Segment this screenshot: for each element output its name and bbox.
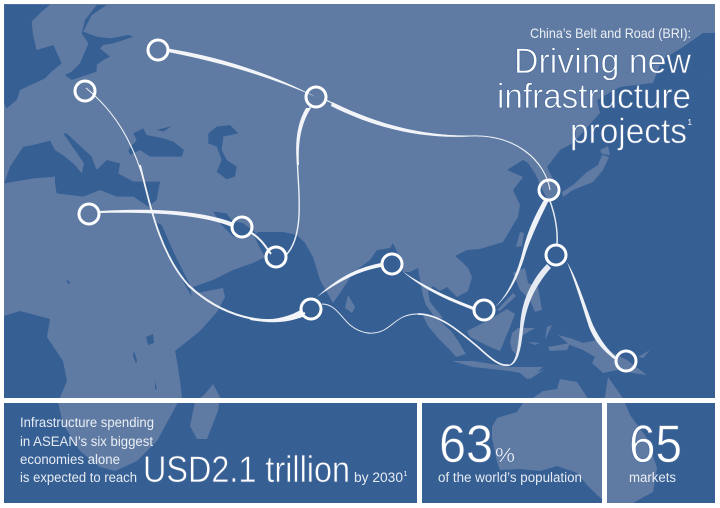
panel: ASEAN infrastructure spending bbox=[20, 415, 408, 490]
population caption: of the world’s population bbox=[438, 470, 582, 485]
route: Philippines Sea to New Guinea bbox=[567, 262, 617, 359]
description text: economies alone bbox=[20, 452, 120, 467]
land: Madagascar bbox=[190, 384, 220, 439]
route: North Africa to Gulf bbox=[100, 210, 234, 227]
panel: markets bbox=[629, 415, 682, 485]
title line 1: Driving new bbox=[514, 42, 692, 81]
route: Bay of Bengal to South China Sea bbox=[402, 271, 474, 310]
panel: world population share bbox=[438, 415, 582, 485]
description text bbox=[20, 415, 154, 485]
route: East China to Philippines Sea bbox=[550, 201, 557, 245]
lakes bbox=[66, 279, 157, 390]
route: Europe to Indian Ocean bbox=[86, 88, 305, 322]
route nodes bbox=[75, 40, 636, 371]
route: Indian Ocean to Bay of Bengal bbox=[317, 263, 381, 297]
title line 2: infrastructure bbox=[497, 77, 691, 116]
title line 3: projects bbox=[570, 112, 687, 151]
route: Gulf to Arabian Sea bbox=[250, 232, 271, 254]
land: Southeast Asian islands bbox=[423, 232, 650, 379]
white panel dividers bbox=[0, 398, 720, 508]
route: Borneo to East China bbox=[494, 198, 549, 308]
by 2030: by 2030 bbox=[354, 470, 403, 485]
inland seas bbox=[4, 5, 257, 297]
route: north Europe to central Asia bbox=[168, 48, 316, 97]
markets caption: markets bbox=[629, 470, 676, 485]
headline figure: USD2.1 trillion bbox=[143, 448, 350, 490]
percent sign: % bbox=[495, 445, 515, 467]
land: Sri Lanka bbox=[345, 295, 355, 313]
description text: in ASEAN’s six biggest bbox=[20, 434, 153, 449]
footnote mark: 1 bbox=[404, 471, 408, 478]
description text: Infrastructure spending bbox=[20, 415, 154, 430]
routes network bbox=[86, 48, 617, 366]
land: Japan bbox=[562, 73, 712, 197]
route: central Asia to Arabian Sea bbox=[285, 106, 311, 256]
description text: is expected to reach bbox=[20, 470, 137, 485]
title footnote mark: 1 bbox=[688, 118, 693, 127]
subtitle: China’s Belt and Road (BRI): bbox=[530, 25, 691, 41]
figure 65: 65 bbox=[629, 415, 682, 474]
figure 63: 63 bbox=[439, 415, 493, 474]
route: central Asia to China coast bbox=[326, 100, 550, 190]
title block bbox=[497, 25, 693, 151]
land: Australia bbox=[492, 377, 657, 503]
route: wave through Java Sea bbox=[322, 264, 551, 366]
